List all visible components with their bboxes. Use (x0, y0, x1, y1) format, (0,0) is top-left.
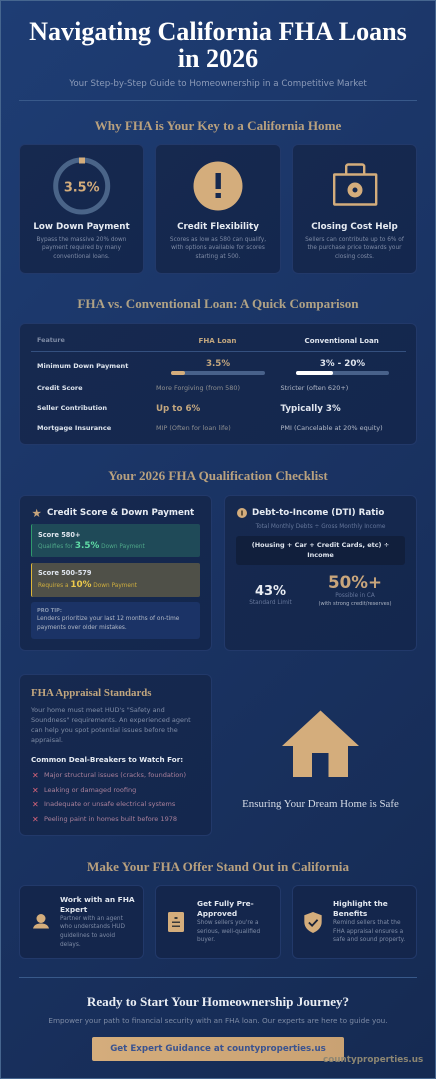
title: Navigating California FHA Loans (29, 17, 407, 46)
subheading: Common Deal-Breakers to Watch For: (31, 754, 183, 764)
table header: FHA: FHA Loan (198, 336, 236, 345)
text: FHA appraisal ensures a (333, 929, 403, 935)
house caption: Ensuring Your Dream Home is Safe (242, 798, 399, 810)
text (333, 920, 405, 943)
panel heading: Debt-to-Income (DTI) Ratio (252, 508, 384, 518)
body text: can help you spot potential issues before the (31, 726, 178, 734)
text: safe and sound property. (333, 937, 405, 943)
title (197, 899, 254, 918)
conventional value with bar (296, 358, 389, 375)
formula: (Housing + Car + Credit Cards, etc) ÷ (252, 540, 389, 548)
text (197, 920, 260, 943)
icon: exclamation circle (194, 162, 242, 210)
item text: Major structural issues (cracks, foundation) (44, 771, 186, 779)
icon: coin (237, 508, 247, 518)
table header: feature: Feature (37, 336, 65, 344)
FHA seller: Up to 6% (156, 404, 200, 414)
FHA value with bar (171, 358, 265, 375)
row: mortgage insurance: Mortgage Insurance (37, 424, 111, 432)
text: Partner with an agent (60, 916, 123, 922)
card title: Credit Flexibility (177, 222, 259, 232)
panel: low down payment (19, 144, 144, 274)
panel heading: Credit Score & Down Payment (47, 508, 194, 518)
card text: starting at 500. (196, 254, 240, 260)
icon: briefcase (333, 163, 378, 206)
tier: 500-579 (31, 562, 200, 596)
item 4: ✕ (32, 814, 39, 824)
stat note: (with strong credit/reserves) (318, 600, 391, 606)
panel: credit score and down payment (19, 495, 212, 651)
panel: appraisal standards (19, 674, 212, 836)
panel: comparison table (19, 323, 417, 445)
panel: credit flexibility (155, 144, 281, 274)
text: serious, well-qualified (197, 929, 260, 935)
icon: clipboard (168, 912, 184, 932)
card text: payment required by many (42, 245, 121, 251)
card text: Scores as low as 580 can qualify, (170, 236, 266, 242)
CTA button: Get Expert Guidance at countyproperties.us (110, 1044, 326, 1054)
card title: Low Down Payment (33, 222, 130, 232)
tier: 580+ (31, 524, 200, 557)
card text (170, 236, 266, 260)
FHA MI: MIP (Often for loan life) (156, 424, 231, 432)
text (60, 916, 125, 948)
card text: Sellers can contribute up to 6% of (305, 236, 404, 242)
formula: Income (307, 551, 334, 559)
panel: closing cost help (292, 144, 417, 274)
pro tip: PRO TIP: (37, 608, 62, 614)
heading: checklist: Your 2026 FHA Qualification Checklist (108, 468, 328, 482)
title: Approved (197, 909, 237, 918)
heading: offer: Make Your FHA Offer Stand Out in California (87, 858, 349, 874)
card text (305, 236, 404, 260)
card text: Bypass the massive 20% down (37, 236, 126, 242)
panel heading: FHA Appraisal Standards (31, 686, 152, 698)
conventional credit score: Stricter (often 620+) (280, 384, 348, 392)
stat: 43%: 43% (255, 584, 286, 599)
item 3: ✕ (32, 800, 39, 809)
card text: conventional loans. (53, 254, 110, 260)
stat label: Possible in CA (335, 592, 375, 598)
title: in 2026 (178, 44, 258, 73)
conventional value with bar: 3% - 20% (320, 358, 365, 368)
title (29, 17, 407, 73)
conventional seller: Typically 3% (280, 404, 341, 414)
title: Highlight the (333, 899, 388, 908)
title: Work with an FHA (60, 894, 135, 904)
card text: the purchase price towards your (307, 245, 402, 251)
title: Get Fully Pre- (197, 899, 254, 908)
item text: Inadequate or unsafe electrical systems (44, 800, 175, 808)
row label: min down: Minimum Down Payment (37, 362, 128, 370)
FHA credit score: More Forgiving (from 580) (156, 384, 240, 392)
stat label: Standard Limit (249, 600, 292, 606)
body text: Soundness" requirements. An experienced agent (31, 716, 191, 724)
formula (236, 536, 405, 564)
body text: Your home must meet HUD's "Safety and (31, 706, 165, 714)
CTA text: Empower your path to financial security with an FHA loan. Our experts are here to guide you. (48, 1016, 388, 1024)
card title: Closing Cost Help (311, 222, 398, 232)
panel: DTI ratio (224, 495, 417, 651)
text: guidelines to avoid (60, 933, 115, 939)
icon: 3.5% ring: 3.5% (64, 180, 100, 196)
pro tip: payments over older mistakes. (37, 625, 127, 631)
CTA heading: Ready to Start Your Homeownership Journey? (87, 994, 349, 1009)
pro tip (31, 602, 200, 638)
text: who understands HUD (60, 924, 125, 930)
body text (31, 706, 191, 744)
formula label: Total Monthly Debts ÷ Gross Monthly Income (256, 524, 385, 530)
panel: highlight benefits (292, 885, 417, 959)
heading: comparison: FHA vs. Conventional Loan: A Quick Comparison (77, 296, 359, 310)
pro tip: Lenders prioritize your last 12 months of on-time (37, 616, 179, 622)
icon: star: ★ (32, 506, 42, 520)
title (333, 899, 388, 918)
tier: 580+: Score 580+ (38, 530, 80, 538)
table header: conventional: Conventional Loan (304, 336, 379, 345)
stat: 50%+: 50%+ (328, 572, 382, 592)
icon: person (33, 914, 49, 928)
tier: 580+: Qualifies for 3.5% Down Payment (38, 541, 145, 551)
text: buyer. (197, 937, 215, 943)
card text: with options available for scores (171, 245, 265, 251)
icon: house (282, 710, 359, 777)
title (60, 894, 135, 914)
row: credit score: Credit Score (37, 384, 83, 392)
text: Remind sellers that the (333, 920, 401, 926)
body text: appraisal. (31, 736, 63, 744)
watermark: countyproperties.us (323, 1055, 423, 1065)
panel: pre-approved (155, 885, 281, 959)
item 2: ✕ (32, 786, 39, 794)
title: Benefits (333, 909, 367, 918)
panel: FHA expert (19, 885, 144, 959)
icon: 3.5% ring (53, 158, 110, 214)
card text: closing costs. (335, 254, 374, 260)
item text: Leaking or damaged roofing (44, 786, 136, 794)
text: delays. (60, 942, 81, 948)
row: seller contribution: Seller Contribution (37, 404, 107, 412)
CTA button (92, 1036, 344, 1060)
item text: Peeling paint in homes built before 1978 (44, 814, 177, 822)
tier: 500-579: Score 500-579 (38, 569, 91, 577)
text: Show sellers you're a (197, 920, 259, 926)
conventional MI: PMI (Cancelable at 20% equity) (280, 424, 383, 432)
FHA value with bar: 3.5% (206, 358, 230, 368)
tier: 500-579: Requires a 10% Down Payment (38, 580, 137, 590)
title: Expert (60, 905, 87, 914)
card text (37, 236, 126, 260)
subtitle: Your Step-by-Step Guide to Homeownership in a Competitive Market (69, 78, 367, 88)
heading: why FHA: Why FHA is Your Key to a California Home (95, 118, 341, 132)
icon: shield check (304, 912, 322, 933)
item 1: ✕ (32, 771, 39, 780)
